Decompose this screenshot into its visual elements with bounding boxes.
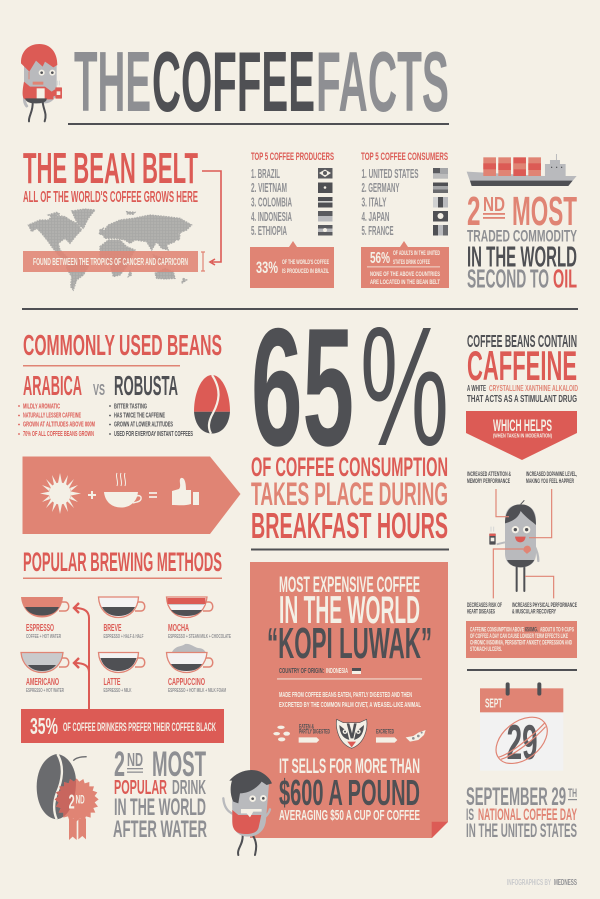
panel: second most popular drink: [37, 745, 207, 843]
icon: bean with award ribbon: 2: [69, 791, 75, 813]
cup: espresso: ESPRESSO: [26, 623, 54, 634]
civet digestion diagram: EXCRETED: [376, 729, 394, 736]
benefit labels: INCREASED ATTENTION &: [467, 471, 511, 478]
icon: cargo ship: [467, 154, 577, 186]
callout: 33 percent: IS PRODUCED IN BRAZIL: [282, 268, 329, 275]
range marker: [201, 252, 205, 271]
heading: TOP 5 COFFEE PRODUCERS: [251, 151, 334, 163]
consumer list: [362, 166, 419, 238]
description: MADE FROM COFFEE BEANS EATEN, PARTLY DIGESTED AND THEN: [279, 692, 412, 699]
icon: thumbs up: [172, 478, 199, 505]
equals sign: [149, 493, 157, 497]
text: traded commodity: OIL: [553, 264, 577, 294]
cup: breve: BREVE: [104, 623, 122, 634]
icon: sun: [40, 473, 81, 514]
subheading: ALL OF THE WORLD'S COFFEE GROWS HERE: [23, 189, 198, 206]
definition: [467, 383, 578, 405]
cup: breve: ESPRESSO + HALF & HALF: [104, 634, 144, 640]
panel: most expensive coffee: [250, 562, 448, 838]
arrows from black coffee bar: [74, 603, 89, 710]
arabica list: [18, 401, 95, 438]
robusta list: BITTER TASTING: [114, 401, 147, 410]
cup: americano: AMERICANO: [26, 677, 59, 688]
text: 2nd most: MOST: [152, 745, 206, 784]
callout: 56 percent: 56%: [370, 250, 390, 267]
icon: calendar: [480, 682, 563, 773]
definition: A WHITE: [467, 383, 486, 393]
icon: red-haired character holding coffee: [21, 44, 62, 121]
icon: calendar: SEPT: [485, 696, 502, 711]
producer list: [251, 166, 292, 238]
callout: 56 percent: NONE OF THE ABOVE COUNTRIES: [370, 271, 440, 278]
producer flags: [318, 168, 332, 236]
heading: 2nd most: [467, 188, 577, 234]
callout bar: 35 percent: [21, 709, 224, 743]
callout: 33 percent: 33%: [256, 258, 278, 277]
cup: americano: [21, 652, 69, 694]
benefit labels: MEMORY PERFORMANCE: [467, 478, 510, 485]
panel: national coffee day: [466, 682, 577, 842]
callout: 56 percent: [361, 241, 449, 288]
text: 2nd most: [114, 745, 206, 784]
arrow: [202, 171, 221, 265]
producer list: 2. VIETNAM: [251, 180, 287, 195]
civet digestion diagram: PARTLY DIGESTED: [299, 729, 330, 736]
cup: mocha: [166, 597, 231, 640]
credit: INFOGRAPHICS BY: [507, 877, 551, 887]
heading: COMMONLY USED BEANS: [23, 330, 222, 362]
arabica list: NATURALLY LESSER CAFFEINE: [23, 411, 81, 420]
heading: 2nd most: ND: [483, 194, 505, 216]
icon: happy character with labels lines: [489, 489, 554, 598]
cup: latte: [98, 652, 145, 694]
cup: mocha: ESPRESSO + STEAM MILK + CHOCOLATE: [168, 634, 231, 640]
headline: 65 percent: [251, 292, 449, 546]
panel: arrow with sun plus coffee equals thumbs up: [22, 456, 240, 534]
callout bar: 35 percent: OF COFFEE DRINKERS PREFER THEIR COFFEE BLACK: [63, 722, 216, 734]
panel: most expensive coffee: MOST EXPENSIVE COFFEE: [279, 572, 420, 597]
arabica vs robusta: VS: [93, 382, 105, 399]
arrow: which helps: (WHEN TAKEN IN MODERATION): [493, 434, 552, 440]
warning box: CAFFEINE CONSUMPTION ABOVE: [470, 626, 524, 634]
robusta list: [109, 401, 193, 438]
warning box: STOMACH ULCERS.: [470, 646, 502, 653]
country of origin: COUNTRY OF ORIGIN:: [279, 666, 324, 675]
plus sign: [88, 491, 96, 499]
text: takes place during: TAKES PLACE DURING: [251, 476, 448, 512]
callout: 56 percent: OF ADULTS IN THE UNITED: [393, 250, 440, 257]
icon: bean with award ribbon: ND: [76, 792, 85, 806]
panel: top producers: [250, 151, 334, 288]
cup: breve: [98, 597, 145, 640]
consumer list: 5. FRANCE: [362, 223, 394, 238]
arrow: which helps: [466, 411, 577, 460]
panel: commonly used beans: ROBUSTA: [114, 370, 178, 401]
icon: calendar: 29: [507, 715, 538, 770]
icon: cheering character: [223, 770, 272, 855]
cup: americano: ESPRESSO + HOT WATER: [26, 688, 64, 694]
band label: FOUND BETWEEN THE TROPICS OF CANCER AND CAPRICORN: [33, 257, 188, 268]
arabica list: 70% OF ALL COFFEE BEANS GROWN: [23, 429, 94, 438]
cup: latte: LATTE: [104, 677, 121, 688]
heading: TOP 5 COFFEE CONSUMERS: [361, 151, 448, 163]
callout: 56 percent: ARE LOCATED IN THE BEAN BELT: [370, 279, 440, 286]
text: 2nd most: 2: [114, 745, 125, 784]
title: THE: [74, 35, 151, 130]
benefit labels: & MUSCULAR RECOVERY: [512, 608, 556, 616]
arabica vs robusta: ARABICA: [23, 370, 82, 401]
description: [279, 692, 421, 709]
world map: [28, 209, 192, 290]
panel: commonly used beans: [18, 330, 230, 438]
cup: mocha: MOCHA: [168, 623, 189, 634]
headline: 65 percent: %: [360, 292, 449, 482]
icon: coffee bean: [194, 375, 230, 434]
callout bar: 35 percent: 35%: [30, 713, 58, 739]
panel: caffeine: [466, 331, 578, 658]
robusta list: GROWN AT LOWER ALTITUDES: [114, 420, 173, 429]
panel: most expensive coffee: IN THE WORLD: [279, 589, 420, 632]
cup: latte: ESPRESSO + MILK: [104, 688, 132, 694]
callout: 33 percent: [250, 241, 334, 288]
country of origin: INDONESIA: [326, 666, 348, 675]
producer list: 1. BRAZIL: [251, 166, 280, 181]
civet digestion diagram: [273, 719, 426, 748]
robusta list: USED FOR EVERYDAY INSTANT COFFEES: [114, 429, 193, 438]
civet digestion diagram: EATEN &: [299, 723, 314, 730]
latitude band: [23, 251, 198, 272]
cup: espresso: [21, 597, 69, 640]
benefit labels: HEART DISEASES: [467, 608, 495, 616]
consumer list: 4. JAPAN: [362, 209, 390, 224]
consumer list: 3. ITALY: [362, 194, 387, 210]
text: FACTS: [316, 35, 449, 130]
credit: MEDNESS: [554, 877, 577, 887]
panel: top consumers: 1. UNITED STATES: [362, 166, 419, 181]
title: [68, 35, 449, 130]
text: 2nd most: ND: [127, 750, 143, 770]
text: traded commodity: [467, 227, 577, 294]
cup: cappuccino: CAPPUCCINO: [168, 677, 205, 688]
headline: 65 percent: 65: [251, 293, 354, 481]
callout: 33 percent: OF THE WORLD'S COFFEE: [282, 259, 329, 266]
text: 600 dollars a pound: $600 A POUND: [279, 772, 420, 813]
panel: top producers: 3. COLOMBIA: [251, 194, 292, 210]
panel: popular brewing methods: [21, 547, 231, 743]
icon: bean with award ribbon: [37, 754, 99, 840]
text: popular drink: DRINK: [172, 777, 206, 799]
text: averaging 50 dollars a cup: AVERAGING $50 A CUP OF COFFEE: [279, 807, 420, 824]
consumer flags: [433, 168, 448, 236]
panel: popular brewing methods: POPULAR BREWING METHODS: [23, 547, 222, 577]
callout: 56 percent: STATES DRINK COFFEE: [393, 259, 430, 266]
icon: steaming cup: [104, 473, 141, 508]
heading: the bean belt: THE BEAN BELT: [23, 144, 198, 193]
arabica list: MILDLY AROMATIC: [23, 401, 60, 410]
benefit labels: DECREASES RISK OF: [467, 602, 502, 609]
text: in the world: IN THE WORLD: [114, 794, 206, 821]
warning box: [466, 621, 577, 658]
arabica list: GROWN AT ALTITUDES ABOVE 800M: [23, 420, 95, 429]
description: EXCRETED BY THE COMMON PALM CIVET, A WEASEL-LIKE ANIMAL: [279, 702, 421, 709]
benefit labels: [467, 471, 577, 616]
warning box: 650MG.: [525, 626, 538, 634]
heading: 2nd most: 2: [467, 188, 480, 234]
panel: top consumers: [361, 151, 449, 288]
text: national coffee day: IS: [466, 805, 474, 824]
panel: second most traded commodity: [467, 154, 577, 294]
cup: cappuccino: ESPRESSO + HOT MILK + MILK FOAM: [168, 688, 226, 694]
panel: top producers: 4. INDONESIA: [251, 209, 292, 224]
heading: kopi luwak: “KOPI LUWAK”: [267, 619, 432, 668]
text: september 29th: TH: [568, 786, 577, 800]
text: popular drink: POPULAR: [114, 777, 167, 799]
text: it sells for more than: IT SELLS FOR MORE THAN: [279, 755, 420, 778]
cup: cappuccino: [166, 644, 226, 694]
title: COFFEE: [152, 35, 315, 130]
producer list: 5. ETHIOPIA: [251, 223, 287, 238]
consumer list: 2. GERMANY: [362, 180, 400, 195]
panel: the bean belt: [23, 144, 221, 290]
text: after water: AFTER WATER: [113, 816, 207, 843]
robusta list: HAS TWICE THE CAFFEINE: [114, 411, 165, 420]
cup: espresso: COFFEE + HOT WATER: [26, 634, 61, 640]
